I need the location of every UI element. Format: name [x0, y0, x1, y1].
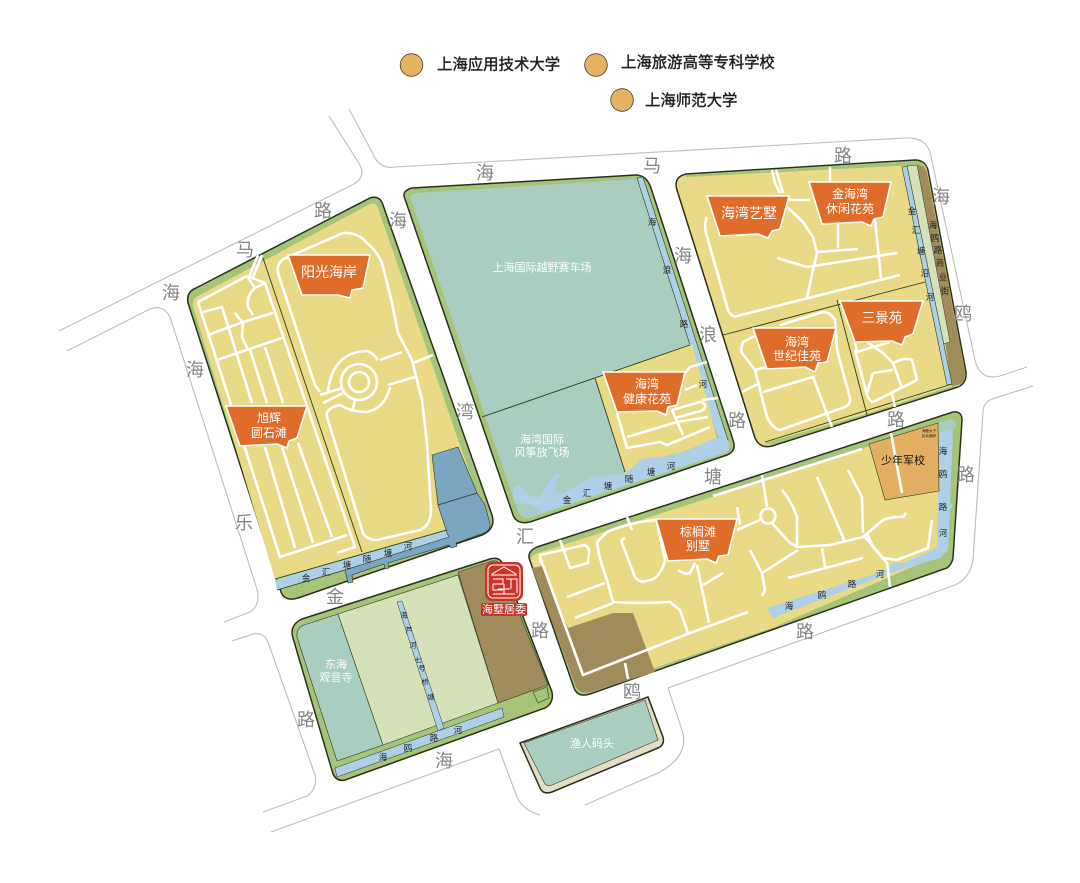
callout: 三景苑: [840, 301, 923, 345]
canal labels: southeast block: [785, 446, 948, 611]
road name labels: 金: [326, 587, 344, 607]
canal labels: south block: 塘: [428, 692, 434, 702]
callout: 海湾艺墅: 海湾艺墅: [721, 205, 777, 221]
canal labels: southeast block: 河: [939, 528, 948, 538]
canal and street labels: northeast block: 业: [939, 272, 947, 282]
canal labels: west block: 塘: [343, 560, 352, 570]
canal labels: west block: 塘: [384, 548, 393, 558]
road name labels: 鸥: [954, 304, 972, 324]
callout: 旭辉圆石滩: 旭辉: [257, 411, 281, 425]
label: 东海观音寺: [320, 657, 352, 684]
legend item: 上海旅游高等专科学校: 上海旅游高等专科学校: [621, 54, 775, 72]
canal labels: south block: 海: [400, 610, 408, 620]
legend item: 上海应用技术大学: [400, 54, 560, 76]
canal labels: central block: 浪: [663, 265, 672, 275]
panel: southeast block (棕榈滩别墅 / 少年军校): [529, 412, 962, 695]
canal labels: south block: 海: [379, 752, 388, 762]
label: 海湾国际风筝放飞场: [514, 432, 570, 459]
road name labels: 海: [674, 246, 692, 266]
label: 少年军校: 少年军校: [881, 453, 925, 467]
white roads: central block: [617, 362, 718, 448]
road name labels: 马: [643, 156, 661, 176]
canal labels: south block: 河: [410, 642, 416, 650]
canal labels: central block: 塘: [647, 467, 656, 477]
road name labels: 路: [796, 622, 814, 642]
road name labels: 路: [887, 410, 905, 430]
road name labels: 海: [476, 163, 494, 183]
road name labels: 路: [314, 201, 332, 221]
legend item: 上海旅游高等专科学校: [585, 54, 775, 76]
road name labels: 海: [186, 360, 204, 380]
white roads: northeast block: [705, 167, 917, 430]
canal labels: southeast block: 路: [848, 579, 857, 589]
canal labels: south block: 鸥: [404, 743, 413, 753]
canal and street labels: northeast block: 路: [934, 245, 943, 255]
canal labels: central block: 随: [625, 474, 634, 484]
road name labels: 鸥: [623, 682, 641, 702]
seal: 海墅居委: 海墅居委: [482, 602, 526, 616]
legend item: 上海师范大学: 上海师范大学: [645, 92, 737, 110]
canal labels: south block: 芦: [406, 626, 412, 634]
road name labels: [162, 146, 975, 771]
canal labels: southeast block: 海: [785, 601, 794, 611]
callout: 阳光海岸: [288, 255, 370, 298]
callout: 海湾世纪佳苑: [753, 328, 836, 372]
callout: 旭辉圆石滩: [226, 406, 307, 448]
canal labels: south block: 七: [414, 656, 422, 664]
callout: 棕榈滩别墅: [656, 519, 737, 563]
canal and street labels: northeast block: 街: [941, 286, 950, 296]
road name labels: 湾: [456, 402, 474, 422]
panel: west block (阳光海岸 / 旭辉圆石滩): [188, 197, 493, 599]
callout: 旭辉圆石滩: 圆石滩: [251, 426, 287, 440]
callout: 海湾世纪佳苑: 海湾: [785, 334, 809, 349]
road name labels: 路: [297, 710, 315, 730]
canal labels: south block: 河: [454, 725, 463, 735]
road name labels: 海: [162, 283, 180, 303]
callout: 金海湾休闲花苑: [809, 182, 891, 226]
canal labels: southeast block: 河: [876, 569, 885, 579]
label: 海湾国际风筝放飞场: 风筝放飞场: [514, 445, 570, 459]
canal labels: west block: 汇: [322, 567, 331, 577]
canal labels: central block: 汇: [583, 488, 592, 498]
canal labels: south block: 桥: [422, 678, 428, 686]
canal labels: south block: 号: [418, 664, 426, 672]
label: 上海国际越野赛车场: 上海国际越野赛车场: [492, 260, 592, 274]
canal labels: central block: [563, 217, 708, 505]
road outlines: [59, 109, 1033, 832]
road name labels: 乐: [235, 513, 253, 533]
panel: northeast block (海湾艺墅 / 金海湾 / 世纪佳苑 / 三景苑): [676, 160, 966, 447]
callout: 金海湾休闲花苑: 金海湾: [832, 186, 868, 201]
callout: 海湾健康花苑: 海湾: [635, 376, 659, 391]
canal and street labels: northeast block: 河: [926, 292, 935, 302]
label: 海墅女子民兵辅林: 民兵辅杯: [922, 433, 937, 438]
label: 东海观音寺: 观音寺: [320, 670, 352, 684]
road name labels: 浪: [699, 325, 717, 345]
canal and street labels: northeast block: 金: [908, 206, 917, 216]
canal and street labels: northeast block: [908, 206, 950, 302]
callout: 金海湾休闲花苑: 休闲花苑: [826, 201, 874, 216]
legend item: 上海应用技术大学: 上海应用技术大学: [437, 54, 560, 74]
callout: 海湾世纪佳苑: 世纪佳苑: [773, 349, 821, 363]
seal: 海墅居委: [481, 562, 527, 616]
canal and street labels: northeast block: 海: [929, 220, 938, 230]
panel: 渔人码头: [520, 697, 663, 793]
road name labels: 马: [236, 240, 254, 260]
callout: 阳光海岸: 阳光海岸: [301, 264, 357, 280]
callout: 海湾艺墅: [707, 196, 789, 238]
road name labels: 路: [957, 465, 975, 485]
canal labels: west block: 金: [302, 573, 311, 583]
legend: [400, 54, 775, 111]
road name labels: 塘: [704, 467, 722, 487]
callout: 三景苑: 三景苑: [862, 310, 903, 326]
canal labels: central block: 金: [563, 495, 572, 505]
canal labels: central block: 河: [699, 379, 708, 389]
canal labels: south block: 路: [430, 733, 439, 743]
canal labels: southeast block: 海: [939, 446, 948, 456]
label: 东海观音寺: 东海: [325, 657, 347, 671]
canal labels: central block: 河: [667, 461, 676, 471]
road name labels: 海: [435, 751, 453, 771]
panel: 渔人码头: 渔人码头: [570, 737, 614, 750]
callout: 海湾健康花苑: [603, 372, 685, 415]
canal and street labels: northeast block: 塘: [917, 246, 926, 256]
road name labels: 汇: [516, 527, 534, 547]
canal labels: south block: [379, 610, 463, 762]
canal labels: southeast block: 鸥: [939, 469, 948, 479]
canal labels: central block: 路: [680, 319, 689, 329]
label: 海墅女子民兵辅林: [922, 428, 937, 438]
canal labels: southeast block: 路: [939, 502, 948, 512]
canal and street labels: northeast block: 沿: [921, 268, 930, 278]
canal labels: central block: 塘: [604, 481, 613, 491]
road name labels: 海: [932, 187, 950, 207]
canal labels: west block: 随: [363, 554, 372, 564]
callout: 棕榈滩别墅: 棕榈滩: [680, 524, 716, 539]
canal labels: west block: 河: [404, 541, 413, 551]
white roads: west block: [198, 233, 433, 557]
canal and street labels: northeast block: 鸥: [931, 233, 940, 243]
road name labels: 海: [389, 211, 407, 231]
label: 海墅女子民兵辅林: 海墅女子: [922, 428, 937, 433]
canal labels: west block: [302, 541, 413, 583]
road name labels: 路: [834, 146, 852, 166]
canal labels: central block: 海: [648, 217, 657, 227]
callout: 棕榈滩别墅: 别墅: [686, 539, 710, 553]
white roads: southeast block: [540, 433, 932, 679]
canal and street labels: northeast block: 汇: [912, 225, 921, 235]
road name labels: 路: [728, 411, 746, 431]
label: 海湾国际风筝放飞场: 海湾国际: [520, 432, 564, 446]
panel: south block (东海观音寺): [292, 558, 552, 780]
canal labels: southeast block: 鸥: [818, 590, 827, 600]
canal and street labels: northeast block: 商: [936, 258, 944, 268]
panel: central block (越野赛车场 / 风筝放飞场 / 健康花苑): [404, 175, 734, 523]
legend item: 上海师范大学: [611, 89, 737, 111]
road name labels: 路: [531, 621, 549, 641]
callout: 海湾健康花苑: 健康花苑: [623, 391, 671, 406]
